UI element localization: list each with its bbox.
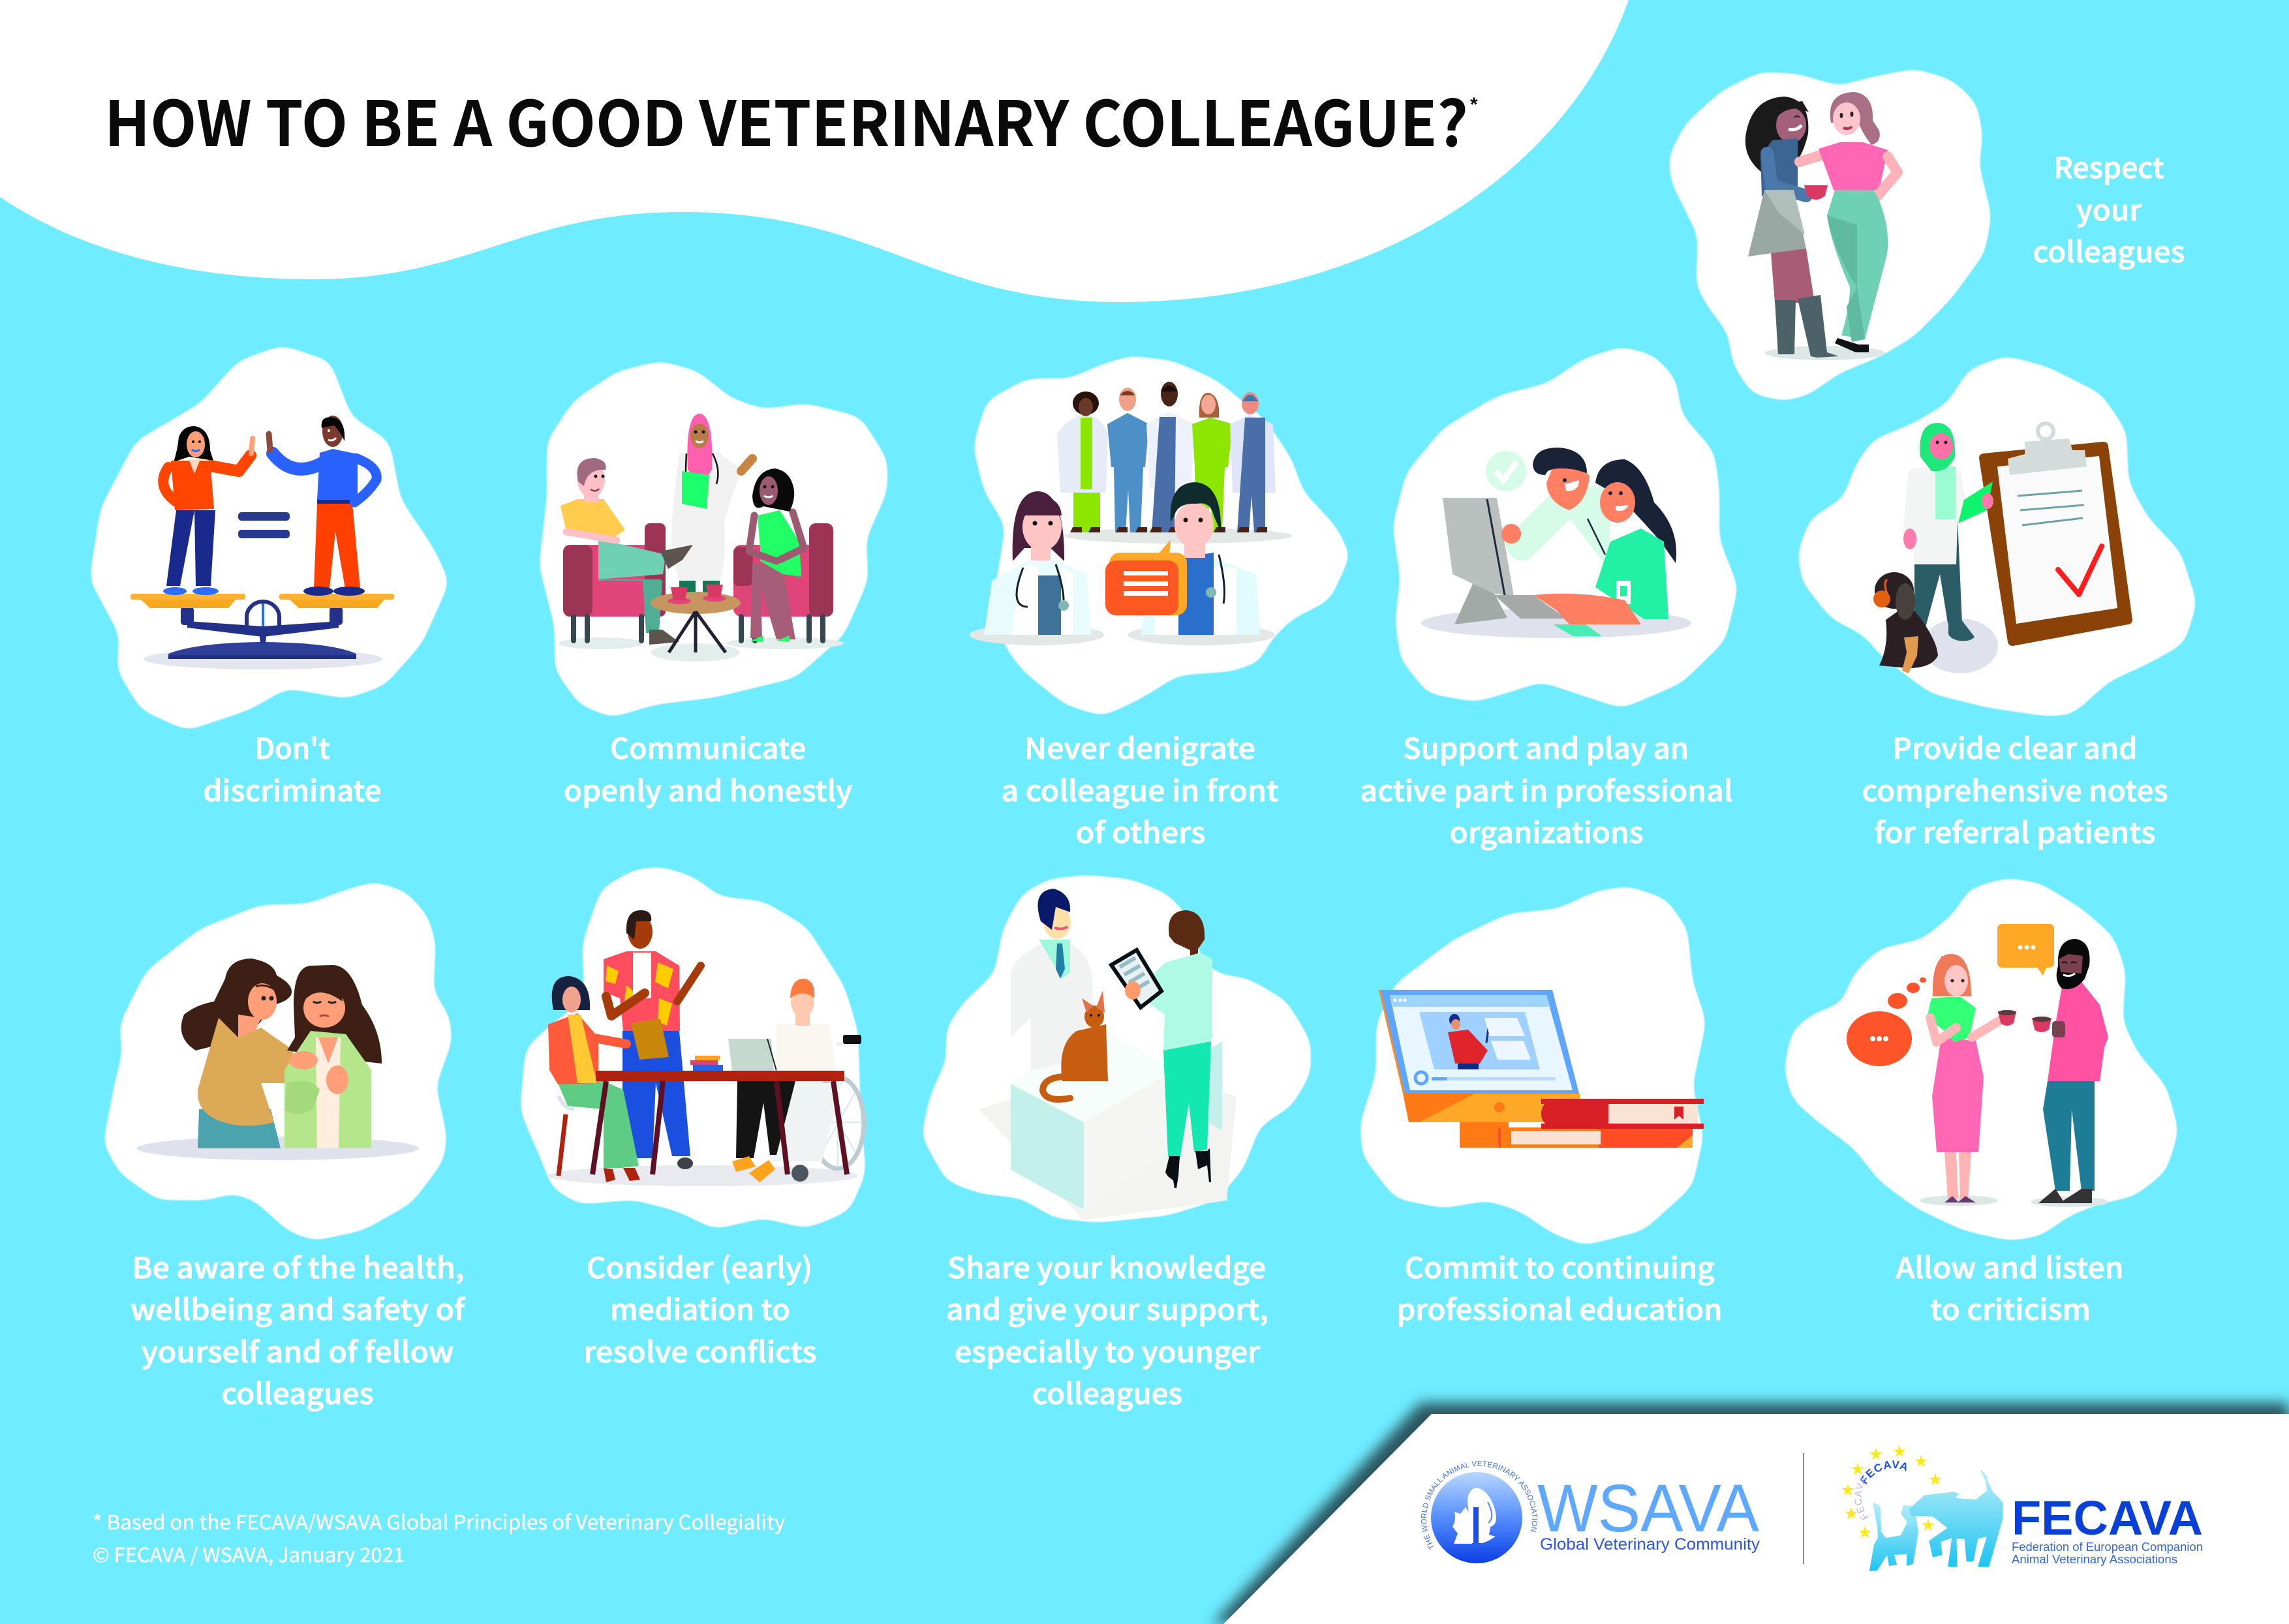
panel: communicate openly and honestly xyxy=(539,361,887,810)
caption: to criticism xyxy=(1930,1287,2091,1328)
caption xyxy=(583,1245,817,1371)
logo: FECAVA: ★ xyxy=(1928,1470,1943,1489)
caption xyxy=(1896,1245,2123,1328)
caption: Don't xyxy=(254,726,330,767)
caption xyxy=(2033,145,2185,271)
caption: mediation to xyxy=(610,1287,790,1328)
illustration: three people meeting at a table xyxy=(547,910,864,1186)
panel: share your knowledge xyxy=(921,875,1311,1413)
footnote: © FECAVA / WSAVA, January 2021 xyxy=(93,1539,405,1568)
logo: FECAVA: Federation of European Companion xyxy=(2012,1540,2203,1554)
blob xyxy=(1360,886,1706,1246)
logo: FECAVA: ★ xyxy=(1914,1452,1928,1471)
caption: Be aware of the health, xyxy=(132,1245,465,1287)
illustration: clipboard, doctor and dog xyxy=(1873,423,2128,673)
blob xyxy=(973,356,1351,716)
illustration: two people with coffee and speech bubbles xyxy=(1847,924,2109,1207)
caption xyxy=(1396,1245,1723,1328)
caption xyxy=(1862,726,2168,851)
caption: yourself and of fellow xyxy=(141,1329,454,1371)
logo: FECAVA: ★ xyxy=(1869,1445,1883,1463)
caption: colleagues xyxy=(222,1371,373,1413)
panel: respect your colleagues xyxy=(1668,69,2185,401)
illustration: scale with two equal people xyxy=(131,416,394,669)
blob xyxy=(1668,69,1991,401)
blob xyxy=(921,875,1311,1223)
caption: Provide clear and xyxy=(1892,726,2138,767)
blob xyxy=(1392,346,1738,709)
blob xyxy=(520,866,866,1229)
top white wave xyxy=(0,0,1629,302)
logo: FECAVA xyxy=(1841,1442,2203,1571)
panel: never denigrate a colleague xyxy=(970,356,1351,851)
panel: continuing professional education xyxy=(1360,886,1723,1328)
illustration: woman comforting a colleague xyxy=(137,958,419,1160)
caption xyxy=(564,726,852,810)
footnote xyxy=(93,1507,785,1568)
logo: WSAVA: THE WORLD SMALL ANIMAL VETERINARY ASSOCIATION xyxy=(1421,1461,1537,1550)
panel: early mediation xyxy=(520,866,866,1371)
logo: WSAVA xyxy=(1421,1461,1760,1563)
panel: allow and listen to criticism xyxy=(1784,878,2179,1328)
caption: your xyxy=(2076,187,2142,229)
caption: especially to younger xyxy=(955,1329,1261,1371)
panel: support professional organizations xyxy=(1360,346,1738,851)
illustration: online lesson monitor and books xyxy=(1379,990,1704,1148)
footnote: * Based on the FECAVA/WSAVA Global Principles of Veterinary Collegiality xyxy=(93,1507,785,1535)
blob xyxy=(1784,878,2179,1241)
logo: FECAVA: FECAVA xyxy=(1860,1460,1907,1484)
caption xyxy=(946,1245,1268,1413)
logo: FECAVA: Animal Veterinary Associations xyxy=(2012,1553,2177,1566)
logo: FECAVA: ★ xyxy=(1851,1460,1865,1478)
title: HOW TO BE A GOOD VETERINARY COLLEAGUE? xyxy=(104,74,1468,164)
caption xyxy=(204,726,381,810)
caption xyxy=(1001,726,1279,851)
logo: FECAVA: ★ xyxy=(1921,1516,1935,1535)
caption: a colleague in front xyxy=(1001,768,1279,810)
caption: and give your support, xyxy=(946,1287,1268,1328)
caption: organizations xyxy=(1450,810,1643,851)
panel: health, wellbeing and safety xyxy=(103,881,466,1413)
logo: WSAVA: WSAVA xyxy=(1537,1471,1759,1546)
logo: FECAVA: ★ xyxy=(1841,1480,1855,1499)
logo: WSAVA: Global Veterinary Community xyxy=(1540,1535,1760,1554)
logo: FECAVA: ★ xyxy=(1844,1504,1858,1523)
panel: don't discriminate xyxy=(89,345,450,810)
logo: FECAVA: ★ xyxy=(1858,1523,1872,1542)
caption: colleagues xyxy=(1032,1371,1182,1413)
caption: for referral patients xyxy=(1874,810,2156,851)
logo: FECAVA: FECAVA xyxy=(1854,1477,1868,1520)
caption: Allow and listen xyxy=(1896,1245,2123,1287)
blob xyxy=(1798,356,2197,716)
caption: Consider (early) xyxy=(587,1245,812,1287)
caption: colleagues xyxy=(2033,229,2185,271)
logo: FECAVA: FECAVA xyxy=(2012,1491,2203,1545)
illustration: three people with armchairs xyxy=(559,414,844,662)
caption: professional education xyxy=(1396,1287,1723,1328)
illustration: two women with coffee xyxy=(1745,92,1897,360)
caption: wellbeing and safety of xyxy=(131,1287,466,1328)
caption xyxy=(1360,726,1733,851)
caption: openly and honestly xyxy=(564,768,852,810)
caption: comprehensive notes xyxy=(1862,768,2168,810)
caption: Commit to continuing xyxy=(1404,1245,1715,1287)
caption: of others xyxy=(1075,810,1206,851)
blob xyxy=(103,881,452,1241)
caption: Support and play an xyxy=(1403,726,1689,767)
caption: Share your knowledge xyxy=(947,1245,1266,1287)
panel: clear notes for referral patients xyxy=(1798,356,2197,851)
blob xyxy=(539,361,887,718)
caption: Respect xyxy=(2054,145,2164,187)
caption: resolve conflicts xyxy=(583,1329,817,1371)
illustration: vet, cat and colleague with tablet xyxy=(979,889,1237,1220)
caption: Communicate xyxy=(610,726,806,767)
blob xyxy=(89,345,450,731)
caption xyxy=(131,1245,466,1413)
caption: Never denigrate xyxy=(1024,726,1255,767)
caption: active part in professional xyxy=(1360,768,1733,810)
logo panel xyxy=(1208,1392,2289,1624)
illustration: two people at a computer xyxy=(1421,448,1691,638)
illustration: team and two vets talking xyxy=(970,382,1292,645)
logo: FECAVA: ★ xyxy=(1892,1442,1907,1461)
title: * xyxy=(1470,94,1478,115)
caption: discriminate xyxy=(204,768,381,810)
